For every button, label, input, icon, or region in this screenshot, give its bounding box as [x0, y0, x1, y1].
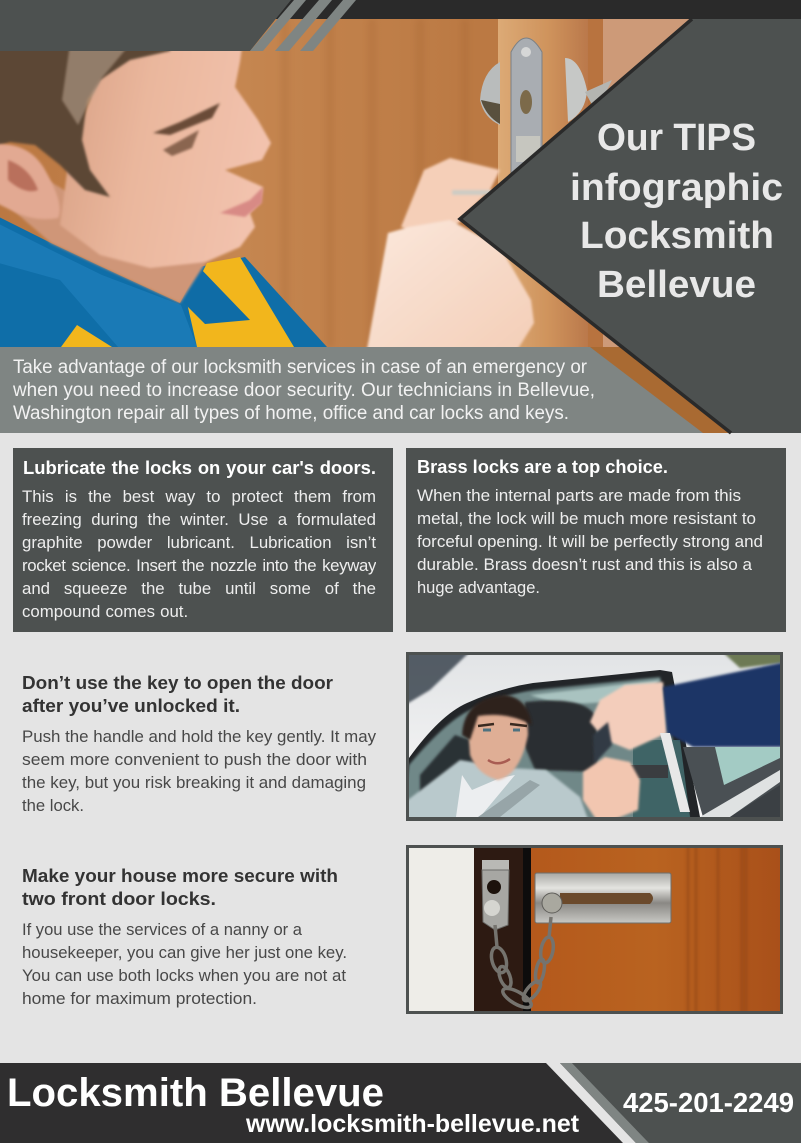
panel: brass locks: metal, the lock will be much more resistant to [417, 509, 756, 528]
tip: two front door locks: Make your house more secure with [22, 865, 338, 886]
panel body text: compound comes out. [22, 602, 188, 621]
tip: do not use key to open door: the lock. [22, 796, 84, 815]
panel body text: and squeeze the tube until some of the [22, 579, 376, 598]
panel body text: This is the best way to protect them from [22, 487, 376, 506]
tip: two front door locks: home for maximum protection. [22, 989, 257, 1008]
panel: brass locks: forceful opening. It will be perfectly strong and [417, 532, 763, 551]
tip: two front door locks [22, 865, 347, 1008]
driver face [467, 713, 530, 782]
header band [0, 0, 801, 51]
tip: two front door locks: two front door locks. [22, 888, 216, 909]
title text: Bellevue [597, 264, 756, 306]
hero photo: locksmith at door [0, 19, 801, 433]
jacket [409, 758, 588, 817]
intro banner: when you need to increase door security. Our technicians in Bellevue, [12, 380, 595, 401]
seat [522, 700, 597, 772]
man portrait [0, 40, 327, 347]
panel: brass locks: durable. Brass doesn’t rust and this is also a [417, 555, 753, 574]
tip: do not use key to open door: Push the handle and hold the key gently. It may [22, 727, 377, 746]
intro banner: Take advantage of our locksmith services in case of an emergency or [13, 357, 588, 378]
hand with key [590, 682, 667, 750]
intro banner [0, 347, 703, 433]
sleeve [663, 661, 790, 747]
website: www.locksmith-bellevue.net [245, 1110, 580, 1138]
title text [570, 117, 783, 306]
ear [0, 144, 60, 219]
footer phone panel [572, 1063, 801, 1143]
window interior [409, 670, 700, 817]
company name: Locksmith Bellevue [7, 1071, 384, 1115]
car photo: key hand-over [400, 645, 790, 825]
panel body text: graphite powder lubricant. Lubrication isn’t [22, 533, 376, 552]
lips [220, 187, 263, 217]
title triangle panel [460, 19, 801, 433]
neck [14, 182, 206, 304]
phone number: 425-201-2249 [623, 1087, 794, 1118]
panel body text [22, 487, 376, 621]
hands holding lock pick [365, 158, 534, 360]
panel body text: rocket science. Insert the nozzle into the keyway [22, 556, 376, 575]
hair [0, 40, 172, 197]
panel: brass locks: Brass locks are a top choice. [417, 456, 668, 477]
title text: Locksmith [580, 215, 774, 257]
tip: do not use key to open door: Don’t use the key to open the door [22, 672, 333, 693]
tip: do not use key to open door: seem more convenient to push the door with [22, 750, 367, 769]
door chain photo [406, 840, 783, 1020]
tip: do not use key to open door: after you’ve unlocked it. [22, 695, 240, 716]
tip: two front door locks: housekeeper, you can give her just one key. [22, 943, 347, 962]
tip: do not use key to open door: the key, but you risk breaking it and damaging [22, 773, 366, 792]
panel heading: Lubricate the locks on your car's doors. [23, 457, 376, 478]
panel: brass locks: When the internal parts are made from this [417, 486, 741, 505]
intro banner: Washington repair all types of home, office and car locks and keys. [13, 403, 569, 424]
door and side window [660, 733, 690, 812]
panel: brass locks [406, 448, 786, 632]
eyebrow and eye [153, 103, 220, 135]
title text: Our TIPS [597, 117, 756, 159]
title text: infographic [570, 167, 783, 209]
tip: two front door locks: If you use the services of a nanny or a [22, 920, 303, 939]
tip: two front door locks: You can use both locks when you are not at [22, 966, 346, 985]
footer band [0, 1063, 801, 1143]
panel body text: freezing during the winter. Use a formulated [22, 510, 376, 529]
shirt [0, 215, 327, 347]
header diagonal stripes [250, 0, 356, 51]
panel: brass locks: huge advantage. [417, 578, 540, 597]
panel: lubricate locks [13, 448, 393, 632]
face [60, 40, 271, 268]
door lock hardware [480, 38, 612, 180]
tip: do not use key to open door [22, 672, 377, 815]
